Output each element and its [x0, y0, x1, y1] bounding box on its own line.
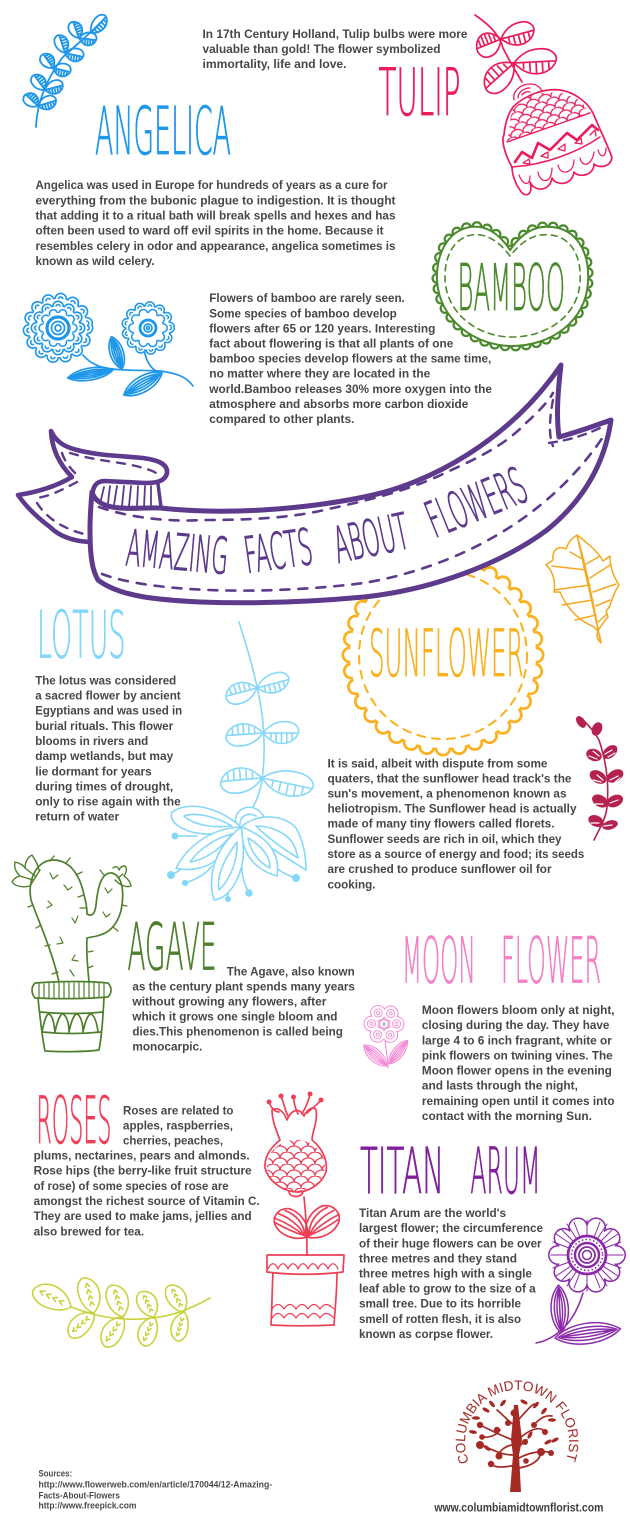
text: bamboo fact: atmosphere and absorbs more carbon dioxide — [209, 397, 468, 411]
text: sources: http://www.freepick.com — [38, 1501, 136, 1512]
banner title: AMAZING — [124, 519, 231, 586]
text: LOTUS — [37, 599, 126, 674]
text: lotus fact: burial rituals. This flower — [35, 719, 173, 733]
icon: crimson sprig — [574, 714, 626, 840]
banner tail left and curl — [18, 431, 167, 542]
text: titan arum fact: leaf able to grow to the size of a — [359, 1282, 536, 1296]
text: sunflower fact: are crushed to produce sunflower oil for — [328, 862, 552, 876]
icon: lotus plant — [167, 622, 315, 902]
text: roses fact: Roses are related to — [123, 1103, 234, 1117]
text: sources: Facts-About-Flowers — [38, 1490, 120, 1501]
text: sunflower fact: made of many tiny flowers called florets. — [328, 817, 554, 831]
text: roses fact: plums, nectarines, pears and almonds. — [34, 1149, 250, 1163]
heading: moon flower: MOON — [402, 925, 476, 998]
text: titan arum fact — [359, 1206, 543, 1341]
small flower rings — [126, 306, 170, 350]
banner: amazing facts about flowers — [18, 365, 611, 603]
badge: sunflower scalloped circle — [350, 562, 536, 748]
text: tulip fact: In 17th Century Holland, Tulip bulbs were more — [202, 27, 468, 41]
text: tulip fact: immortality, life and love. — [202, 57, 346, 71]
text: agave fact: which it grows one single bloom and — [131, 1009, 337, 1023]
text: bamboo fact: Some species of bamboo develop — [209, 306, 397, 320]
icon: lime sprig — [29, 1275, 210, 1351]
big flower rings — [29, 299, 87, 357]
text: tulip fact — [202, 27, 468, 71]
text: bamboo fact — [208, 291, 492, 426]
text: titan arum fact: small tree. Due to its horrible — [359, 1297, 521, 1311]
text: roses fact: apples, raspberries, — [123, 1118, 233, 1132]
text: agave fact: The Agave, also known — [227, 964, 355, 978]
text: tulip fact: valuable than gold! The flower symbolized — [202, 42, 440, 56]
text: lotus fact — [35, 674, 182, 824]
banner title — [124, 457, 535, 586]
text: sunflower fact: cooking. — [328, 877, 376, 891]
icon: potted red flower — [265, 1092, 345, 1326]
text: bamboo fact: world.Bamboo releases 30% more oxygen into the — [208, 382, 492, 396]
logo: columbia midtown florist: COLUMBIA MIDTOWN FLORIST — [456, 1380, 578, 1464]
text: lotus fact: The lotus was considered — [35, 674, 176, 688]
text: roses fact — [34, 1103, 260, 1238]
text: titan arum fact: Titan Arum are the world's — [359, 1206, 506, 1220]
text: agave fact: monocarpic. — [132, 1040, 202, 1054]
text: bamboo fact: Flowers of bamboo are rarely seen. — [209, 291, 405, 305]
text: angelica fact: that adding it to a ritual bath will break spells and hexes and has — [36, 208, 396, 222]
text: angelica fact: often been used to ward off evil spirits in the home. Because it — [36, 224, 384, 238]
text: roses fact: of rose) of some species of rose are — [34, 1179, 229, 1193]
text: angelica fact — [36, 178, 396, 268]
icon: blue flowers — [29, 299, 193, 402]
text: roses fact: amongst the richest source of Vitamin C. — [34, 1194, 260, 1208]
text: moon flower fact: Moon flower opens in the evening — [422, 1064, 612, 1078]
text: ROSES — [36, 1084, 111, 1159]
text: AGAVE — [128, 910, 216, 985]
text: angelica fact: resembles celery in odor and appearance, angelica sometimes is — [36, 239, 396, 253]
text: website url: www.columbiamidtownflorist.com — [433, 1502, 603, 1514]
text: roses fact: They are used to make jams, jellies and — [34, 1209, 252, 1223]
text: titan arum fact: known as corpse flower. — [359, 1327, 493, 1341]
text: titan arum fact: three metres and they stand — [359, 1251, 517, 1265]
text: moon flower fact: and lasts through the night, — [422, 1079, 578, 1093]
text: angelica fact: everything from the bubonic plague to indigestion. It is thought — [36, 194, 396, 208]
text: bamboo fact: no matter where they are located in the — [209, 367, 430, 381]
text: moon flower fact: Moon flowers bloom only at night, — [422, 1003, 615, 1017]
text: lotus fact: during times of drought, — [35, 779, 173, 793]
text: bamboo fact: flowers after 65 or 120 years. Interesting — [209, 321, 435, 335]
text: agave fact — [131, 964, 355, 1054]
text: moon flower fact: large 4 to 6 inch fragrant, white or — [422, 1033, 612, 1047]
badge: bamboo heart — [437, 227, 588, 346]
text: lotus fact: Egyptians and was used in — [35, 704, 182, 718]
logo tree — [469, 1398, 559, 1492]
text: moon flower fact: closing during the day. They have — [422, 1018, 609, 1032]
banner main ribbon — [90, 365, 611, 603]
text: moon flower fact — [422, 1003, 615, 1123]
text: ANGELICA — [95, 93, 231, 170]
text: titan arum fact: largest flower; the circumference — [359, 1221, 543, 1235]
text: TULIP — [378, 56, 460, 131]
text: sources: http://www.flowerweb.com/en/article/170044/12-Amazing- — [38, 1480, 272, 1491]
icon: blue sprig — [21, 12, 111, 127]
icon: tulip flower — [472, 15, 612, 195]
text: sunflower fact: heliotropism. The Sunflower head is actually — [328, 801, 577, 815]
text: sources — [38, 1469, 272, 1512]
text: lotus fact: return of water — [35, 810, 119, 824]
text: titan arum fact: smell of rotten flesh, it is also — [359, 1312, 521, 1326]
text: sunflower fact — [328, 756, 584, 891]
text: agave fact: dies.This phenomenon is called being — [132, 1025, 343, 1039]
icon: orange leaf — [546, 535, 619, 643]
text: lotus fact: only to rise again with the — [35, 795, 181, 809]
text: titan arum fact: of their huge flowers can be over — [359, 1236, 542, 1250]
text: roses fact: Rose hips (the berry-like fruit structure — [34, 1164, 252, 1178]
heading: titan arum: TITAN — [360, 1135, 444, 1208]
text: sunflower fact: quaters, that the sunflower head track's the — [328, 771, 572, 785]
text: moon flower fact: contact with the morning Sun. — [422, 1109, 592, 1123]
text: bamboo fact: compared to other plants. — [209, 412, 354, 426]
text: lotus fact: damp wetlands, but may — [35, 749, 173, 763]
banner title: FACTS — [241, 518, 316, 585]
text: moon flower fact: remaining open until it comes into — [422, 1094, 615, 1108]
banner title: ABOUT — [328, 502, 414, 575]
text: sunflower fact: store as a source of energy and food; its seeds — [328, 847, 584, 861]
text: bamboo fact: fact about flowering is that all plants of one — [209, 336, 453, 350]
text: roses fact: cherries, peaches, — [123, 1134, 223, 1148]
text: lotus fact: blooms in rivers and — [35, 734, 148, 748]
text: angelica fact: known as wild celery. — [36, 254, 154, 268]
text: sunflower fact: sun's movement, a phenomenon known as — [328, 786, 567, 800]
icon: purple flower — [536, 1220, 623, 1348]
text: titan arum fact: three metres high with a single — [359, 1267, 532, 1281]
text: lotus fact: lie dormant for years — [35, 764, 152, 778]
text: roses fact: also brewed for tea. — [34, 1224, 144, 1238]
text: agave fact: without growing any flowers, after — [131, 994, 327, 1008]
text: agave fact: as the century plant spends many years — [132, 979, 355, 993]
text: angelica fact: Angelica was used in Europe for hundreds of years as a cure for — [36, 178, 388, 192]
text: sunflower fact: Sunflower seeds are rich in oil, which they — [328, 832, 562, 846]
text: sunflower fact: It is said, albeit with dispute from some — [328, 756, 548, 770]
icon: moon flower — [360, 1012, 412, 1070]
icon: potted cactus — [12, 855, 131, 1052]
text: sources: Sources: — [38, 1469, 72, 1480]
text: lotus fact: a sacred flower by ancient — [35, 689, 181, 703]
text: bamboo fact: bamboo species develop flowers at the same time, — [209, 352, 491, 366]
text: moon flower fact: pink flowers on twining vines. The — [422, 1048, 613, 1062]
